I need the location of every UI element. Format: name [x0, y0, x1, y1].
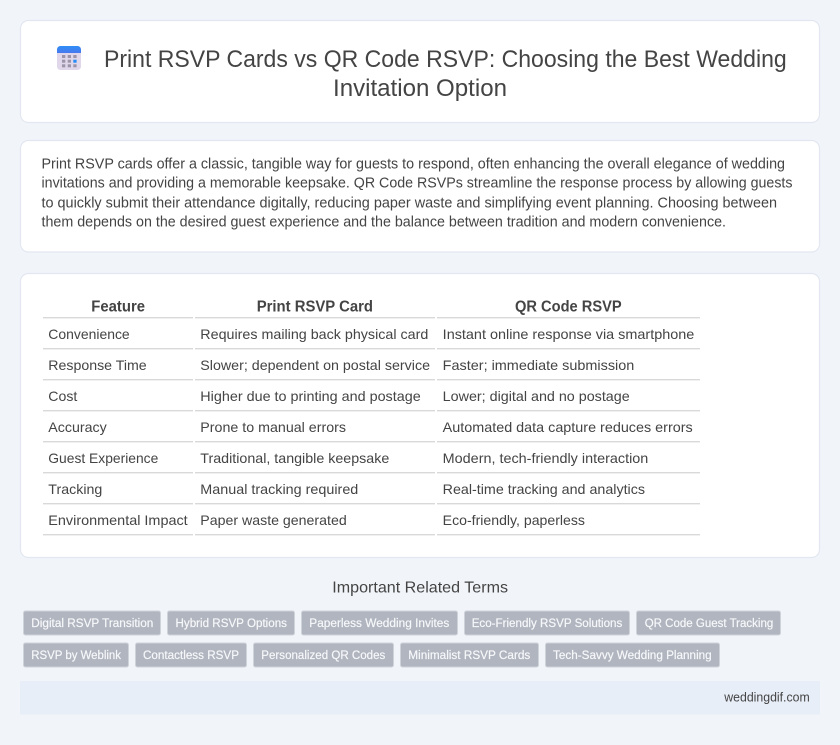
row: response time: Slower; dependent on postal service	[200, 357, 430, 373]
related terms tags	[24, 611, 780, 667]
row: environmental impact: Paper waste generated	[200, 512, 347, 528]
panel: summary text: to quickly submit their attendance digitally, reducing paper waste and simplifying event planning. Choosing between	[42, 196, 777, 212]
panel: summary text: Print RSVP cards offer a classic, tangible way for guests to respond, often enhancing the overall elegance of wedding	[42, 156, 785, 172]
row: cost: Higher due to printing and postage	[200, 388, 421, 404]
tag: Contactless RSVP	[143, 648, 239, 662]
icon: calendar	[57, 46, 81, 70]
tag: Paperless Wedding Invites	[309, 616, 449, 630]
tag: QR Code Guest Tracking	[645, 616, 773, 630]
row: response time: Response Time	[48, 357, 147, 373]
tag	[400, 643, 538, 667]
row: tracking	[48, 481, 645, 497]
row: tracking: Real-time tracking and analytics	[443, 481, 645, 497]
tag: Eco-Friendly RSVP Solutions	[472, 616, 622, 630]
tag	[546, 643, 720, 667]
tag	[24, 643, 128, 667]
row: guest experience: Traditional, tangible keepsake	[200, 450, 390, 466]
tag: Hybrid RSVP Options	[176, 616, 287, 630]
row: convenience: Convenience	[48, 326, 130, 342]
row: cost	[48, 388, 630, 404]
footer: weddingdif.com	[723, 690, 810, 705]
tag	[24, 611, 160, 635]
tag: RSVP by Weblink	[31, 648, 122, 662]
row: guest experience	[48, 450, 648, 466]
row: guest experience: Modern, tech-friendly interaction	[443, 450, 648, 466]
heading: important related terms: Important Related Terms	[332, 580, 508, 597]
tag: Tech-Savvy Wedding Planning	[553, 648, 712, 662]
title	[104, 46, 787, 102]
row: accuracy: Prone to manual errors	[200, 419, 346, 435]
row: accuracy: Automated data capture reduces errors	[443, 419, 693, 435]
table header: Feature	[91, 299, 145, 316]
tag	[636, 611, 780, 635]
row: response time	[48, 357, 634, 373]
title: Print RSVP Cards vs QR Code RSVP: Choosing the Best Wedding	[104, 46, 787, 73]
tag: Minimalist RSVP Cards	[408, 648, 530, 662]
tag	[254, 643, 394, 667]
tag: Personalized QR Codes	[261, 648, 385, 662]
panel: summary text: them depends on the desired guest experience and the balance between tradition and modern convenience.	[42, 215, 726, 231]
tag	[136, 643, 246, 667]
row: response time: Faster; immediate submission	[443, 357, 634, 373]
row: convenience: Requires mailing back physical card	[200, 326, 428, 342]
title: Invitation Option	[333, 75, 507, 102]
row: environmental impact: Environmental Impact	[48, 512, 188, 528]
table header: QR Code RSVP	[515, 299, 622, 316]
row: accuracy: Accuracy	[48, 419, 107, 435]
table header: Print RSVP Card	[257, 299, 373, 316]
tag	[302, 611, 458, 635]
row: tracking: Tracking	[48, 481, 102, 497]
row: environmental impact	[48, 512, 585, 528]
row: cost: Lower; digital and no postage	[443, 388, 630, 404]
table header	[91, 299, 622, 316]
tag: Digital RSVP Transition	[31, 616, 153, 630]
panel: summary text: invitations and providing a memorable keepsake. QR Code RSVPs streamline the response process by allowing guests	[42, 176, 792, 192]
row: convenience: Instant online response via smartphone	[443, 326, 695, 342]
panel: comparison table	[20, 274, 820, 558]
panel: summary text	[20, 140, 820, 252]
footer	[20, 681, 820, 714]
row: environmental impact: Eco-friendly, paperless	[443, 512, 585, 528]
row: accuracy	[48, 419, 693, 435]
row: cost: Cost	[48, 388, 77, 404]
row: convenience	[48, 326, 695, 342]
tag	[464, 611, 630, 635]
tag	[168, 611, 294, 635]
row: guest experience: Guest Experience	[48, 450, 158, 466]
panel: header	[20, 20, 820, 122]
row: tracking: Manual tracking required	[200, 481, 358, 497]
